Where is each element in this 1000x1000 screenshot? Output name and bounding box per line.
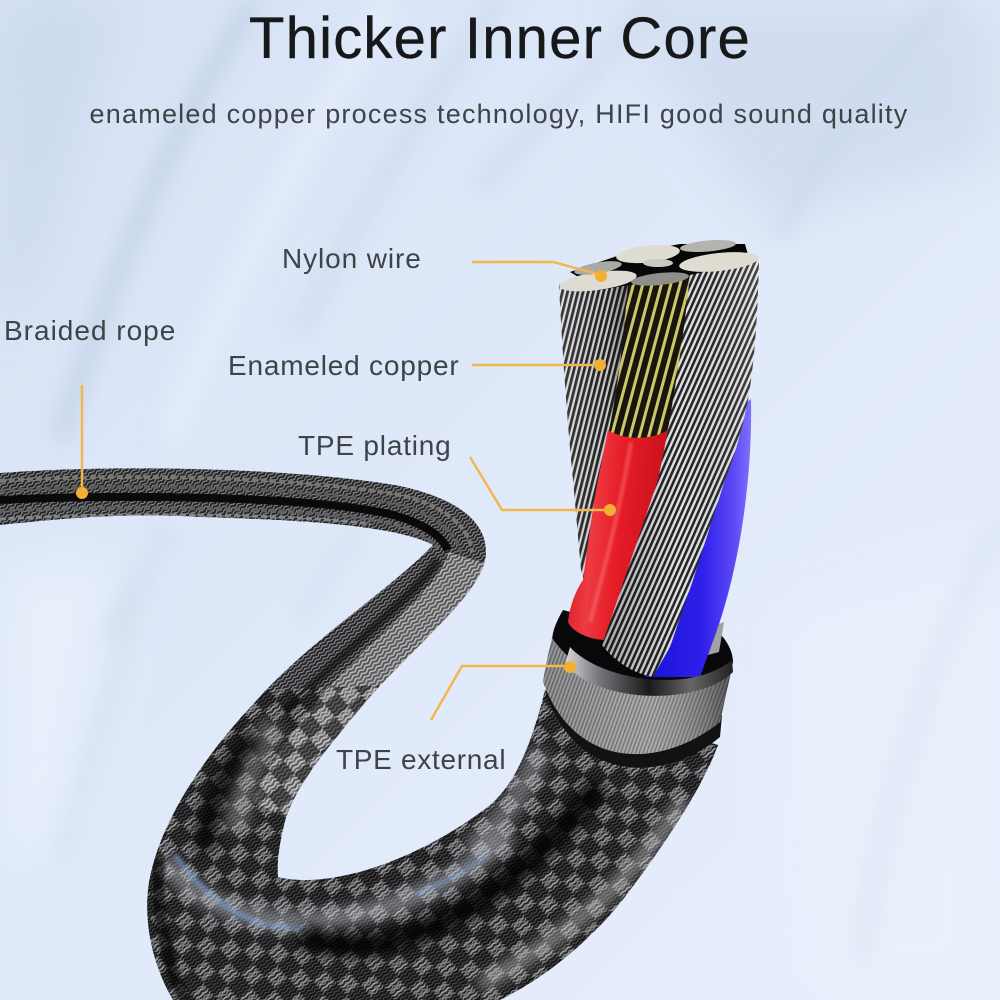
wire: gold copper strand — [606, 274, 692, 445]
connector ring — [543, 638, 733, 768]
ring back interior — [552, 610, 733, 695]
callout: Enameled copper — [228, 350, 606, 381]
callout: Nylon wire — [282, 243, 607, 282]
wire: silver sliver behind blue — [708, 622, 724, 655]
callout: TPE plating: TPE plating — [298, 430, 452, 461]
callout: Braided rope — [4, 315, 176, 499]
wire: red TPE core — [568, 430, 668, 640]
ring knurled band — [543, 638, 731, 754]
thick section weave blocks — [120, 680, 740, 1000]
callout: TPE external: TPE external — [336, 744, 506, 775]
upper diagonal section light weave — [270, 558, 468, 810]
shading bands along thick loop — [159, 725, 685, 1000]
wire tops: strand cross sections — [558, 238, 760, 295]
wire: blue TPE core — [645, 399, 751, 677]
braided cable — [0, 468, 718, 1000]
callout: TPE plating — [298, 430, 616, 516]
callout: Nylon wire: Nylon wire — [282, 243, 422, 274]
ring lip — [565, 647, 733, 696]
wire: right silver strand — [602, 256, 759, 677]
thin section braid rows — [0, 477, 472, 810]
callout: Braided rope: Braided rope — [4, 315, 176, 346]
callout: Enameled copper: Enameled copper — [228, 350, 459, 381]
subtitle: enameled copper process technology, HIFI good sound quality — [90, 99, 908, 129]
ring dark base collar — [545, 690, 722, 768]
callout: TPE external — [336, 661, 576, 775]
wire: left silver strand — [559, 274, 640, 585]
title: Thicker Inner Core — [249, 6, 751, 71]
